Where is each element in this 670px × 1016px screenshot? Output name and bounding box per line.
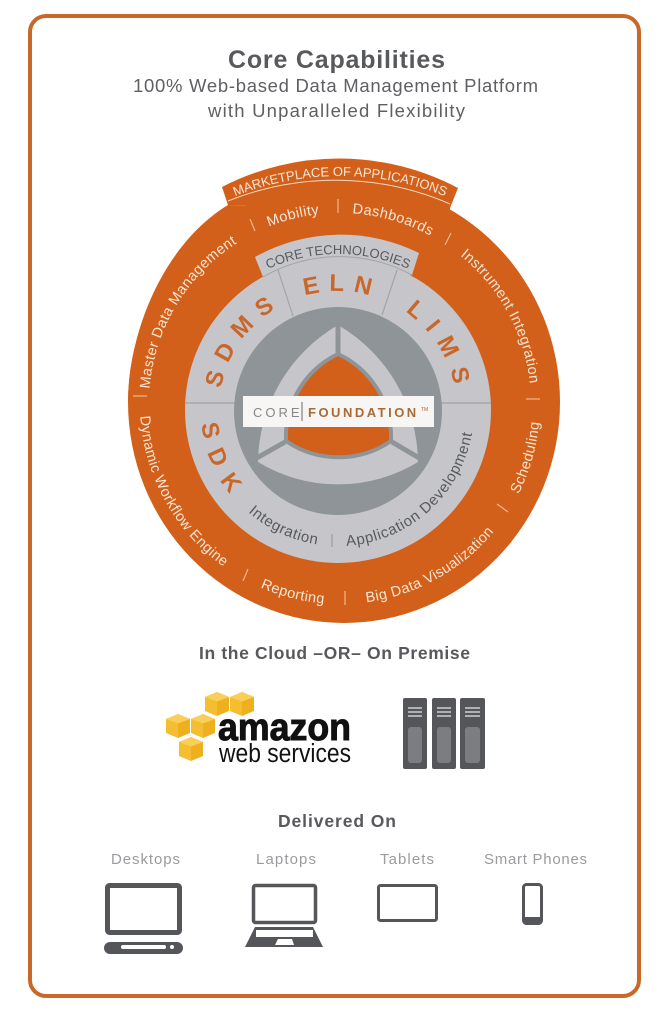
logo: amazon web services: amazon <box>218 707 351 749</box>
device labels <box>111 851 587 868</box>
application labels: Scheduling <box>510 422 542 493</box>
application labels: Dynamic Workflow Engine <box>138 416 226 566</box>
application labels: Reporting <box>261 578 324 606</box>
diagram: capabilities wheel <box>128 158 560 623</box>
technology labels: LIMS <box>406 300 470 383</box>
subtitle: with Unparalleled Flexibility <box>207 100 466 121</box>
core foundation label <box>243 396 434 427</box>
icon: laptop <box>245 886 323 947</box>
heading: deployment: In the Cloud –OR– On Premise <box>199 643 470 663</box>
subtitle <box>133 75 538 121</box>
SDK sub-labels: Application Development <box>346 432 472 548</box>
core foundation label: TM <box>421 407 428 413</box>
core foundation hub <box>234 307 442 515</box>
tab: core technologies <box>255 234 419 278</box>
icon: tablet <box>378 886 436 920</box>
device labels: Tablets <box>380 851 434 868</box>
outer ring: applications <box>128 158 560 623</box>
SDK sub-labels <box>249 432 472 548</box>
subtitle: 100% Web-based Data Management Platform <box>133 75 538 96</box>
core foundation label: FOUNDATION <box>308 405 419 420</box>
tab: marketplace of applications <box>222 158 458 208</box>
technology labels: ELN <box>303 274 372 295</box>
application labels: Master Data Management <box>140 236 237 388</box>
technology labels: SDMS <box>206 298 272 387</box>
device labels: Desktops <box>111 851 180 868</box>
title: Core Capabilities <box>228 46 445 74</box>
application labels <box>138 203 542 606</box>
SDK sub-labels: Integration <box>249 505 317 544</box>
application labels: Big Data Visualization <box>366 528 494 602</box>
heading: delivered on: Delivered On <box>278 811 396 831</box>
logo: amazon web services: web services <box>218 740 351 768</box>
tab: core technologies: CORE TECHNOLOGIES <box>266 245 410 268</box>
device labels: Smart Phones <box>484 851 587 868</box>
icon: smart phone <box>523 884 542 925</box>
application labels: Dashboards <box>353 203 432 235</box>
core foundation label: CORE <box>253 405 303 420</box>
device labels: Laptops <box>256 851 316 868</box>
logo: amazon web services <box>166 692 351 768</box>
technology labels: SDK <box>202 423 242 494</box>
icon: cubes <box>166 692 254 761</box>
application labels: Mobility <box>266 206 318 226</box>
icon: desktop <box>104 886 183 954</box>
tab: marketplace of applications: MARKETPLACE OF APPLICATIONS <box>232 166 447 196</box>
icon: servers <box>403 698 485 769</box>
application labels: Instrument Integration <box>461 248 538 383</box>
technology labels <box>202 274 470 494</box>
inner ring: core technologies <box>185 234 491 563</box>
